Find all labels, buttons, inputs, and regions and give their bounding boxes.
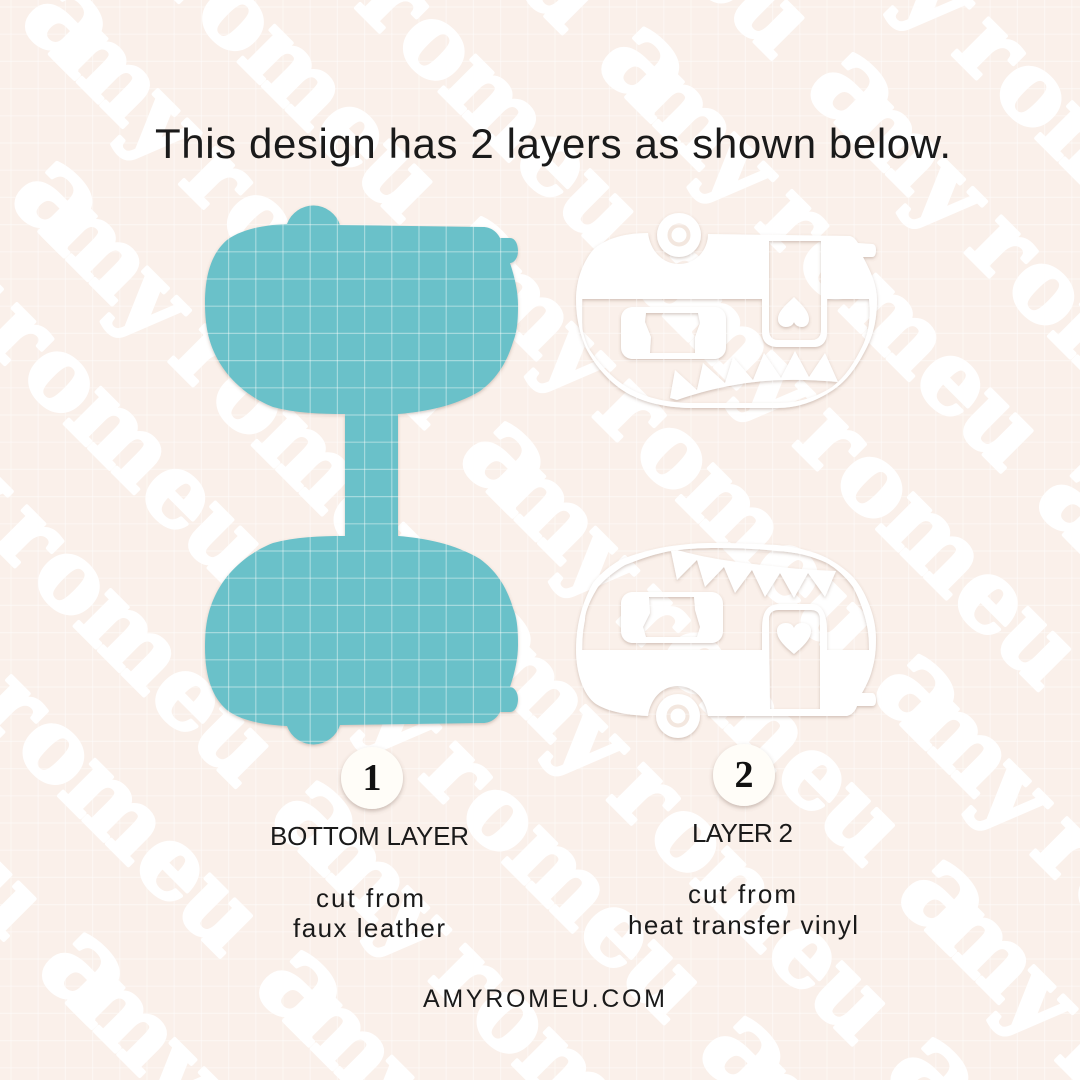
bunting spikes [670, 351, 838, 400]
label: layer 2: cut from [688, 879, 796, 909]
badge: number 2 [713, 744, 775, 806]
footer website: AMYROMEU.COM [423, 985, 665, 1013]
label: bottom layer [270, 821, 469, 943]
wheel [657, 213, 701, 257]
panel: layer 2 upside-down white camper [576, 213, 877, 408]
watermark pattern: amy romeu: amy romeu [425, 556, 936, 1067]
panel: layer 2 upright white camper [576, 543, 876, 738]
watermark pattern: amy romeu: amy romeu [434, 378, 946, 889]
label: layer 2: heat transfer vinyl [628, 910, 858, 940]
watermark pattern: amy romeu: amy romeu [0, 118, 498, 629]
watermark pattern: amy romeu: amy romeu [237, 535, 748, 1046]
badge: number 2: 2 [734, 754, 754, 796]
window with curtains [621, 307, 726, 359]
panel: bottom layer teal camper shape [205, 206, 518, 744]
label: bottom layer: faux leather [293, 913, 445, 943]
label: layer 2: LAYER 2 [692, 818, 793, 848]
label: layer 2 [628, 818, 858, 940]
badge: number 1: 1 [362, 757, 382, 799]
bunting flags [671, 550, 836, 598]
wheel [656, 694, 700, 738]
window with curtains [621, 592, 723, 643]
watermark pattern: amy romeu: amy romeu [410, 173, 922, 684]
badge: number 1 [341, 747, 403, 809]
label: bottom layer: cut from [316, 883, 424, 913]
label: bottom layer: BOTTOM LAYER [270, 821, 469, 851]
heart [778, 297, 809, 327]
heart [777, 623, 811, 654]
title: This design has 2 layers as shown below. [155, 120, 951, 167]
